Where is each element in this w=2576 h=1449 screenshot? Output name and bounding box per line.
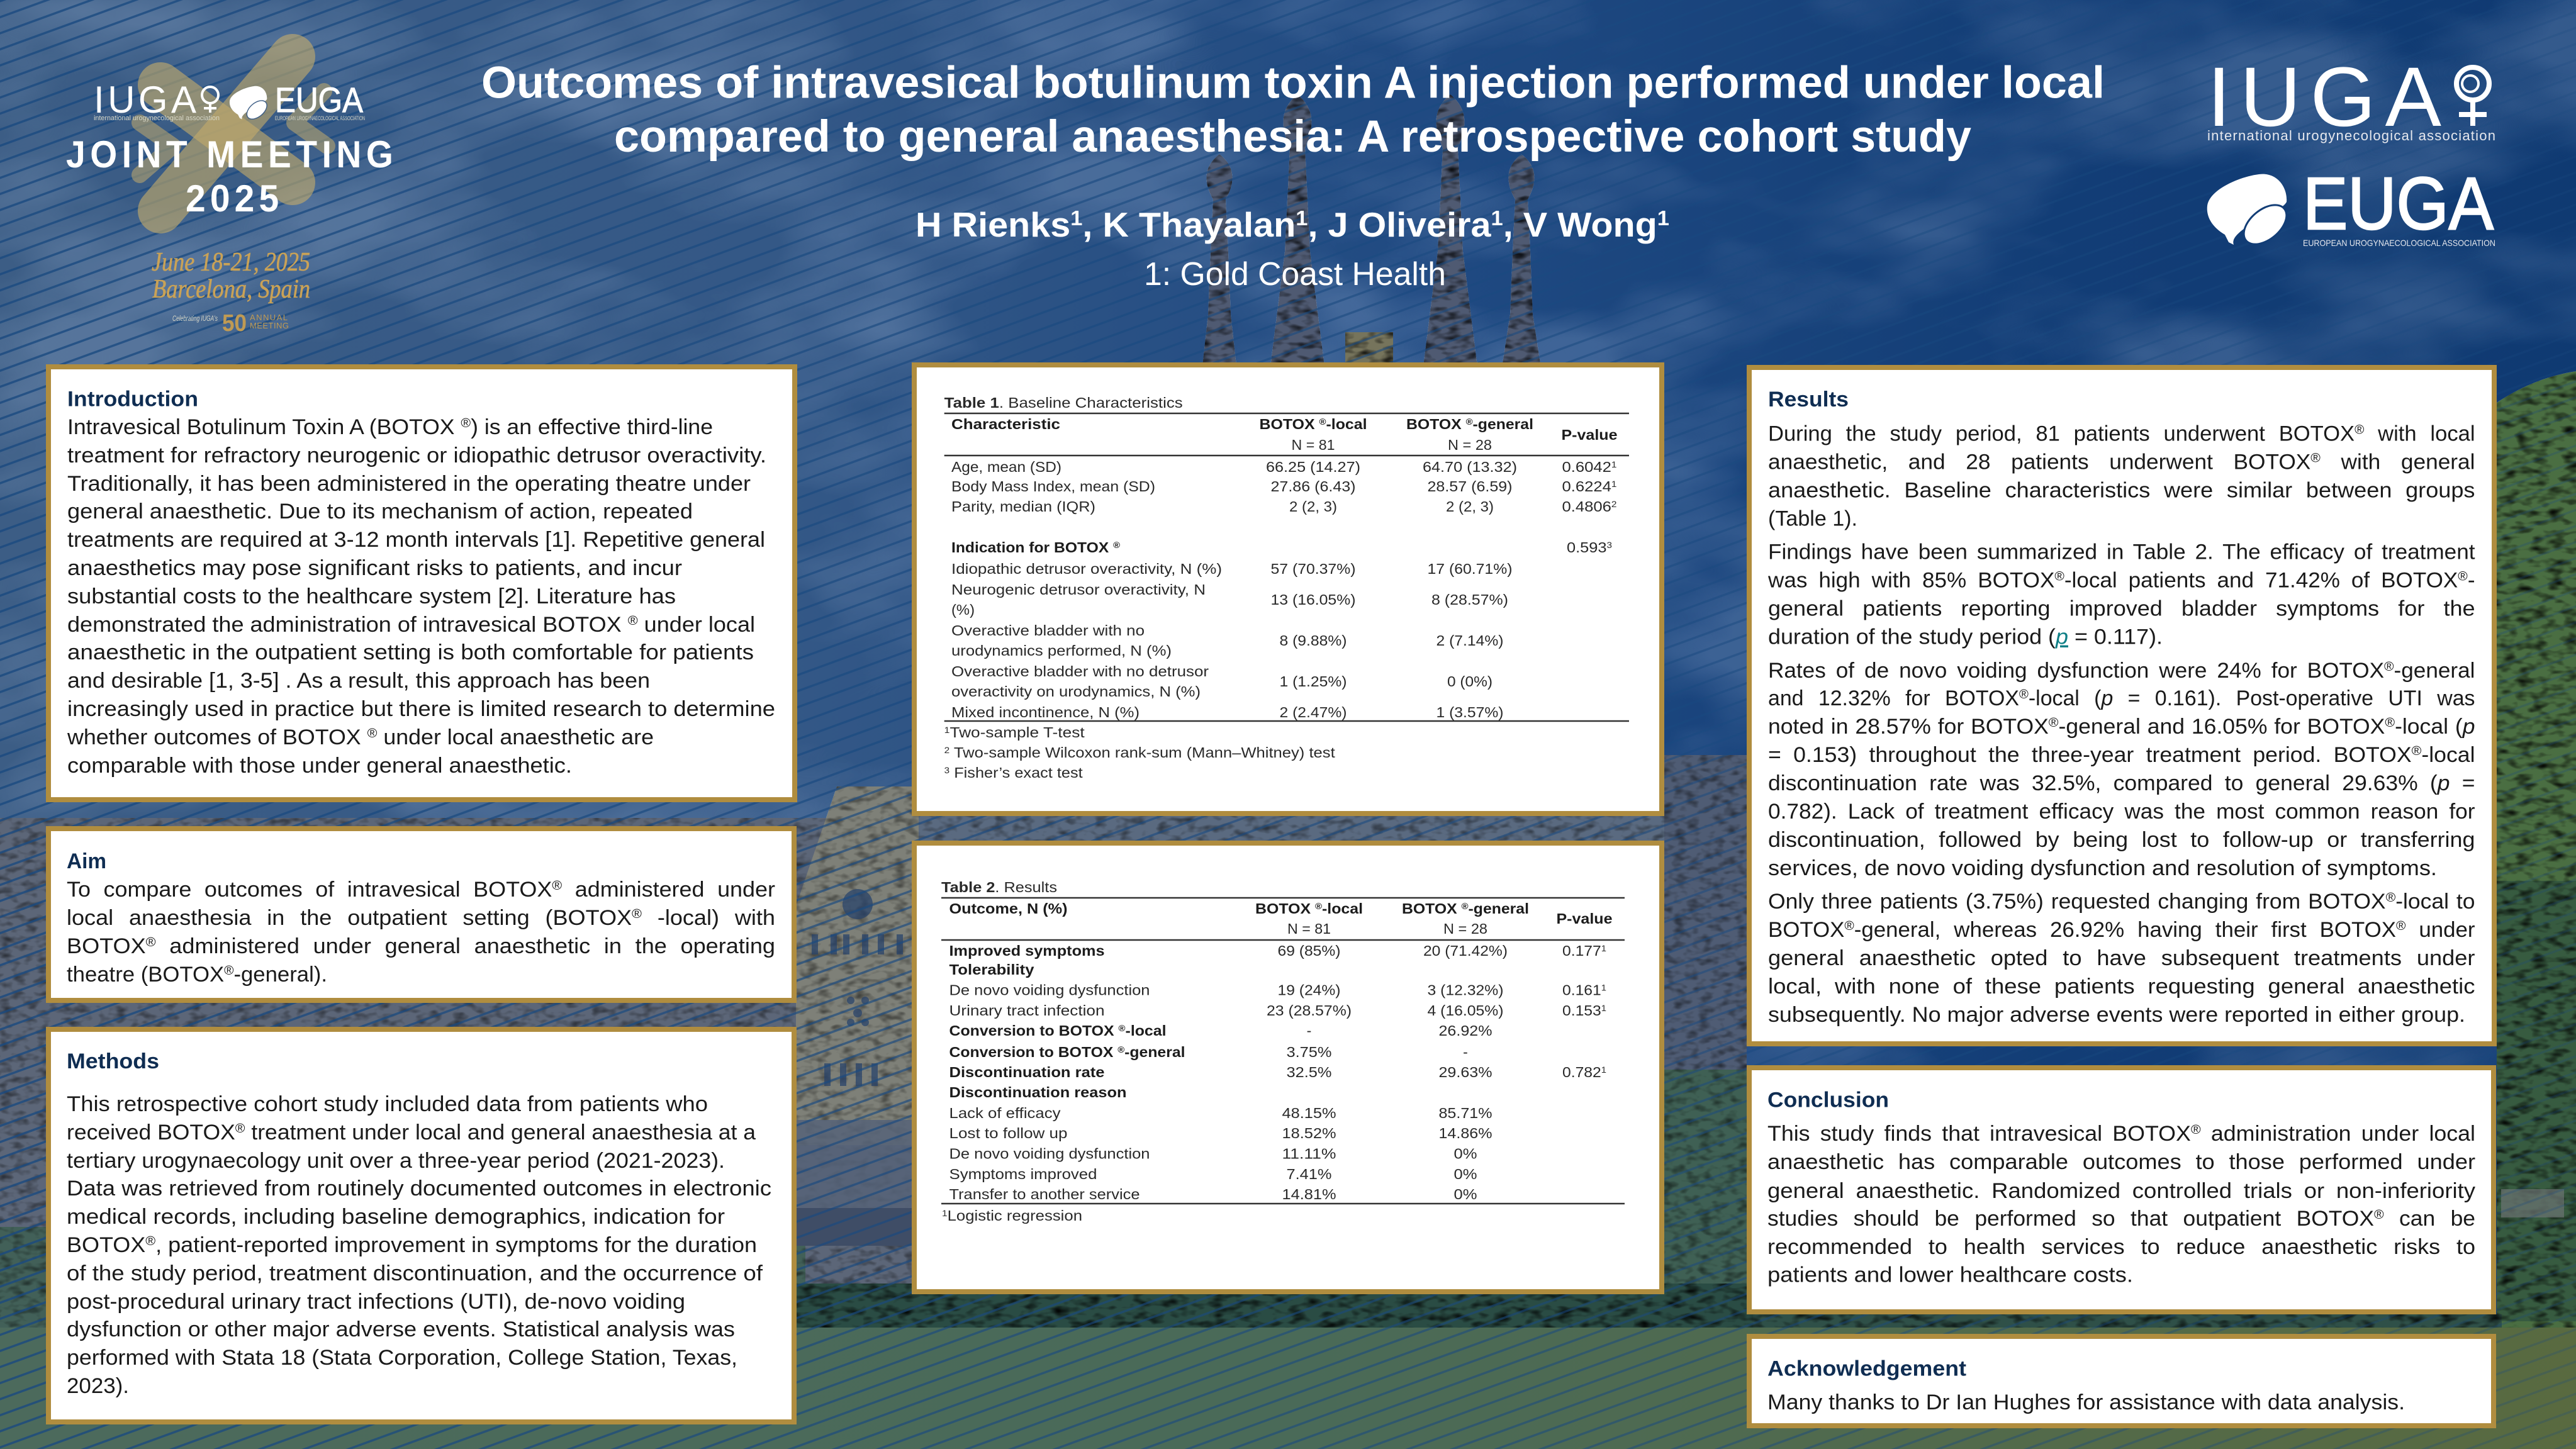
table 1 body rows: 17 (60.71%) [1427,561,1513,577]
title: Outcomes of intravesical botulinum toxin A injection performed under local [481,58,2105,108]
table 2 header row: Outcome, N (%) [949,900,1067,917]
table 1 body rows: 1 (3.57%) [1436,704,1504,720]
text block: methods body: dysfunction or other major adverse events. Statistical analysis was [67,1318,735,1341]
anniversary label [172,310,289,337]
table 2 body rows: Discontinuation rate [949,1064,1105,1080]
IUGA subtitle: international urogynecological association [2207,128,2495,143]
table 2 body rows: Urinary tract infection [949,1002,1105,1019]
table 2 body rows: - [1307,1022,1311,1039]
table 1 footnotes: 1Two-sample T-test [944,724,1085,741]
panel: conclusion [1749,1068,2494,1312]
text block: results paragraph 3: discontinuation rate was 32.5%, compared to general 29.63% ( p = [1768,771,2475,795]
text block: introduction body: demonstrated the administration of intravesical BOTOX ® under local [67,613,755,637]
text block: methods body: 2023). [67,1374,129,1398]
table 1 body rows: 8 (9.88%) [1280,632,1347,649]
table 1 body rows: 2 (2, 3) [1289,498,1337,515]
EUGA wordmark: EUGA [2303,162,2494,245]
text block: introduction body: anaesthetics may pose significant risks to patients, and incur [67,556,682,580]
text block: results paragraph 4: general anaesthetic opted to have subsequent treatments under [1768,946,2475,970]
table 2 body rows: 18.52% [1282,1125,1336,1141]
text block: methods body: post-procedural urinary tract infections (UTI), de-novo voiding [67,1290,685,1314]
table 2 body rows [949,943,1606,1202]
authors: H Rienks 1, K Thayalan 1, J Oliveira 1, V Wong 1 [916,205,1669,244]
text block: aim body: local anaesthesia in the outpatient setting (BOTOX ® -local) with [67,906,775,930]
table 2 header row: P-value [1557,910,1612,927]
IUGA small wordmark: IUGA [94,79,196,121]
table 2 footnote: 1Logistic regression [942,1207,1082,1224]
IUGA small subtitle: international urogynecological association [94,115,220,122]
table 1 body rows: 28.57 (6.59) [1427,478,1513,495]
text block: results paragraph 4: BOTOX®-general, whereas 26.92% having their first BOTOX ® under [1768,918,2475,942]
text block: conclusion body: patients and lower healthcare costs. [1767,1263,2133,1287]
table 1 body rows: 2 (2, 3) [1446,498,1494,515]
anniversary label: Celebrating IUGA's [172,314,218,323]
heading: results: Results [1768,388,1849,411]
heading: acknowledgement: Acknowledgement [1767,1357,1966,1381]
text block: methods body: of the study period, treatment discontinuation, and the occurrence of [67,1262,763,1285]
text block: methods body: medical records, including baseline demographics, indication for [67,1205,725,1229]
text block: results paragraph 3: noted in 28.57% for BOTOX ®-general and 16.05% for BOTOX ®-local (p [1768,715,2475,739]
panel: introduction [48,367,795,800]
table 1 body rows: Idiopathic detrusor overactivity, N (%) [951,561,1222,577]
table 2 body rows: 48.15% [1282,1105,1336,1121]
text block: results paragraph 4: subsequently. No major adverse events were reported in either group. [1768,1003,2465,1027]
table 1 rules [944,413,1629,721]
text block: results paragraph 4 [1768,890,2475,1027]
table 2 body rows: 3.75% [1286,1044,1331,1060]
icon: bladder small [230,86,270,122]
text block: introduction body: comparable with those under general anaesthetic. [67,754,572,778]
panel: methods [48,1029,794,1422]
icon: female symbol small [202,87,218,113]
date label: June 18-21, 2025 [152,248,310,277]
table 2 body rows: Conversion to BOTOX ®-local [949,1022,1167,1039]
IUGA wordmark: IUGA [2207,50,2442,144]
table 1 body rows: Body Mass Index, mean (SD) [951,478,1155,495]
table 2 body rows: 0% [1453,1186,1477,1202]
table 2 body rows: 14.86% [1438,1125,1492,1141]
logo: IUGA EUGA Joint Meeting 2025 [66,57,393,337]
table 1 caption: Table 1 . Baseline Characteristics [944,394,1183,411]
anniversary label: 50 [222,310,247,337]
table 1 header row: Characteristic [951,416,1060,432]
text block: introduction body: treatment for refractory neurogenic or idiopathic detrusor overactivity. [67,444,766,467]
table 1 body rows: 64.70 (13.32) [1423,459,1517,475]
text block: results paragraph 3: discontinuation, followed by being lost to follow-up or transferring [1768,828,2475,852]
table 1 body rows: 13 (16.05%) [1271,591,1355,608]
table 2 header row: N = 28 [1443,920,1487,937]
table 1 footnotes: 2 Two-sample Wilcoxon rank-sum (Mann–Whitney) test [944,744,1335,761]
text block: methods body [67,1092,771,1398]
EUGA small wordmark: EUGA [275,80,364,120]
table 2 body rows: 0.161 1 [1562,982,1606,998]
table 2 header row [949,900,1612,937]
text block: results paragraph 3: 0.782). Lack of treatment efficacy was the most common reason for [1768,800,2475,824]
table 2 body rows: Discontinuation reason [949,1084,1126,1100]
text block: results paragraph 3: Rates of de novo voiding dysfunction were 24% for BOTOX ®-general [1768,659,2475,683]
text block: conclusion body: recommended to health services to reduce anaesthetic risks to [1767,1235,2475,1259]
panel: results [1749,367,2494,1044]
table 1 body rows: 0.6224 1 [1562,478,1617,495]
table 1 footnotes: 3 Fisher’s exact test [944,764,1083,781]
table 2 body rows: Lost to follow up [949,1125,1067,1141]
year label: 2025 [186,178,279,220]
text block: results paragraph 1: anaesthetic, and 28 patients underwent BOTOX ® with general [1768,450,2475,474]
table 2 body rows: Symptoms improved [949,1166,1097,1182]
text block: introduction body: increasingly used in practice but there is limited research to determine [67,697,775,721]
table 2 body rows: 26.92% [1438,1022,1492,1039]
panel: table 2 results [914,843,1662,1292]
table 1 footnotes [944,724,1335,781]
table 1 body rows: 8 (28.57%) [1431,591,1508,608]
table 2 body rows: 69 (85%) [1277,943,1340,959]
table 2 header row: BOTOX ®-local [1255,900,1363,917]
table 2 caption: Table 2 . Results [941,879,1057,895]
heading: aim: Aim [67,849,106,873]
table 2 body rows: 0.782 1 [1562,1064,1606,1080]
table 1 body rows: (%) [951,601,975,618]
table 2 body rows: Transfer to another service [949,1186,1140,1202]
table 2 rules [941,898,1625,1204]
text block: aim body: To compare outcomes of intravesical BOTOX ® administered under [67,878,775,902]
icon: female symbol [2456,67,2489,126]
table 1 body rows: 2 (7.14%) [1436,632,1504,649]
text block: methods body: This retrospective cohort study included data from patients who [67,1092,708,1116]
table 2 body rows: 0% [1453,1166,1477,1182]
text block: results paragraph 2: Findings have been summarized in Table 2. The efficacy of treatment [1768,540,2475,564]
joint meeting label: JOINT MEETING [66,134,393,176]
EUGA subtitle: EUROPEAN UROGYNAECOLOGICAL ASSOCIATION [2303,238,2495,248]
text block: conclusion body: studies should be performed so that outpatient BOTOX ® can be [1767,1207,2475,1231]
text block: introduction body: and desirable [1, 3-5] . As a result, this approach has been [67,669,650,693]
table 2 body rows: 11.11% [1282,1146,1336,1162]
panel: acknowledgement [1749,1336,2494,1426]
text block: results paragraph 1: (Table 1). [1768,507,1857,531]
table 2 body rows: Tolerability [949,961,1034,978]
table 2 body rows: 0.153 1 [1562,1002,1606,1019]
table 1 body rows [951,459,1617,720]
table 1 header row [951,416,1617,453]
table 1 body rows: 0.4806 2 [1562,498,1617,515]
table 1 body rows: Parity, median (IQR) [951,498,1095,515]
text block: introduction body: substantial costs to the healthcare system [2]. Literature has [67,585,676,608]
text block: introduction body: anaesthetic in the outpatient setting is both comfortable for patients [67,641,754,664]
table 2 body rows: De novo voiding dysfunction [949,1146,1150,1162]
panel: aim [48,829,794,1000]
table 2 body rows: 23 (28.57%) [1267,1002,1352,1019]
location label: Barcelona, Spain [152,275,310,304]
icon: bladder [2207,174,2292,250]
table 2 body rows: De novo voiding dysfunction [949,982,1150,998]
table 1 body rows: Overactive bladder with no [951,622,1145,639]
text block: results paragraph 2: general patients reporting improved bladder symptoms for the [1768,597,2475,621]
table 2 body rows: 0.177 1 [1562,943,1606,959]
text block: results paragraph 3: services, de novo voiding dysfunction and resolution of symptoms. [1768,856,2437,880]
text block: methods body: BOTOX ®, patient-reported improvement in symptoms for the duration [67,1233,757,1257]
table 1 header row: BOTOX ®-general [1406,416,1533,432]
table 1 body rows: 57 (70.37%) [1271,561,1355,577]
text block: conclusion body [1767,1122,2475,1287]
text block: results paragraph 1: During the study period, 81 patients underwent BOTOX ® with local [1768,422,2475,446]
table 1 body rows: Indication for BOTOX ® [951,539,1120,556]
table 2 body rows: Improved symptoms [949,943,1105,959]
table 1 header row: N = 28 [1448,437,1492,453]
text block: introduction body [67,415,775,778]
text block: conclusion body: anaesthetic has comparable outcomes to those performed under [1767,1150,2475,1174]
table 2 body rows: 4 (16.05%) [1427,1002,1504,1019]
text block: introduction body: Traditionally, it has been administered in the operating theatre under [67,472,751,496]
table 1 body rows: Age, mean (SD) [951,459,1061,475]
table 1 body rows: Neurogenic detrusor overactivity, N [951,581,1206,598]
table 2 body rows: 3 (12.32%) [1427,982,1504,998]
table 1 body rows: Mixed incontinence, N (%) [951,704,1140,720]
icon: gold X emblem [140,57,327,211]
text block: introduction body: treatments are required at 3-12 month intervals [1]. Repetitive general [67,528,765,552]
table 2 body rows: 32.5% [1286,1064,1331,1080]
text block: methods body: Data was retrieved from routinely documented outcomes in electronic [67,1177,771,1200]
text block: methods body: tertiary urogynaecology unit over a three-year period (2021-2023). [67,1149,725,1173]
table 1 body rows: urodynamics performed, N (%) [951,642,1172,659]
table 2 body rows: 14.81% [1282,1186,1336,1202]
table 2 body rows: Lack of efficacy [949,1105,1061,1121]
title [481,58,2105,162]
text block: results paragraph 4: local, with none of these patients requesting general anaesthetic [1768,975,2475,999]
anniversary label: MEETING [250,321,289,330]
table 2 body rows: - [1463,1044,1468,1060]
text block: results paragraph 2: was high with 85% BOTOX ®-local patients and 71.42% of BOTOX ®- [1767,569,2475,593]
text block: introduction body: Intravesical Botulinum Toxin A (BOTOX ®) is an effective third-line [67,415,713,439]
table 2 body rows: 20 (71.42%) [1423,943,1508,959]
table 2 body rows: 0% [1453,1146,1477,1162]
text block: results paragraph 2 [1767,540,2475,649]
table 1 body rows: 0 (0%) [1447,673,1492,690]
text block: acknowledgement body: Many thanks to Dr Ian Hughes for assistance with data analysis. [1767,1390,2405,1414]
table 1 body rows: 0.6042 1 [1562,459,1617,475]
title: compared to general anaesthesia: A retrospective cohort study [614,112,1972,162]
text block: conclusion body: general anaesthetic. Randomized controlled trials or non-inferiority [1767,1179,2475,1203]
text block: results paragraph 3: = 0.153) throughout the three-year treatment period. BOTOX ®-local [1768,743,2475,767]
text block: results paragraph 1 [1768,422,2475,531]
table 1 body rows: 27.86 (6.43) [1271,478,1355,495]
table 1 body rows: 66.25 (14.27) [1266,459,1360,475]
text block: conclusion body: This study finds that intravesical BOTOX ® administration under local [1767,1122,2475,1146]
logo: IUGA [2207,50,2495,144]
text block: methods body: received BOTOX ® treatment under local and general anaesthesia at a [67,1121,756,1144]
EUGA small subtitle: EUROPEAN UROGYNAECOLOGICAL ASSOCIATION [275,115,365,121]
table 2 body rows: 19 (24%) [1277,982,1340,998]
table 1 body rows: 0.593 3 [1567,539,1612,556]
panel: table 1 baseline characteristics [914,365,1662,814]
text block: results paragraph 1: anaesthetic. Baseline characteristics were similar between groups [1768,479,2475,503]
text block: aim body: theatre (BOTOX®-general). [67,963,327,987]
table 2 body rows: 7.41% [1286,1166,1331,1182]
table 2 body rows: 85.71% [1438,1105,1492,1121]
table 1 header row: N = 81 [1291,437,1335,453]
text block: results paragraph 3: and 12.32% for BOTOX®-local (p = 0.161). Post-operative UTI was [1768,686,2475,710]
text block: aim body [67,878,775,987]
table 2 body rows: 29.63% [1438,1064,1492,1080]
text block: methods body: performed with Stata 18 (Stata Corporation, College Station, Texas, [67,1346,737,1370]
text block: introduction body: whether outcomes of BOTOX ® under local anaesthetic are [67,725,654,749]
heading: conclusion: Conclusion [1767,1088,1889,1112]
table 1 body rows: Overactive bladder with no detrusor [951,663,1209,680]
table 1 header row: BOTOX ®-local [1260,416,1367,432]
table 1 body rows: 2 (2.47%) [1280,704,1347,720]
table 1 header row: P-value [1562,427,1617,443]
heading: methods: Methods [67,1049,159,1073]
anniversary label: ANNUAL [250,313,288,322]
text block: results paragraph 2: duration of the study period ( p = 0.117). [1768,625,2163,649]
table 2 body rows: Conversion to BOTOX ®-general [949,1044,1185,1060]
affiliation: 1: Gold Coast Health [1144,256,1446,293]
text block: aim body: BOTOX ® administered under general anaesthetic in the operating [67,934,775,958]
text block: results paragraph 4: Only three patients (3.75%) requested changing from BOTOX ®-local to [1768,890,2475,914]
table 1 body rows: 1 (1.25%) [1280,673,1347,690]
table 2 header row: N = 81 [1287,920,1331,937]
text block: introduction body: general anaesthetic. Due to its mechanism of action, repeated [67,500,693,523]
text block: results paragraph 3 [1768,659,2475,880]
heading: introduction: Introduction [67,388,198,411]
table 1 body rows: overactivity on urodynamics, N (%) [951,683,1201,700]
logo: EUGA [2207,162,2495,250]
table 2 header row: BOTOX ®-general [1402,900,1529,917]
